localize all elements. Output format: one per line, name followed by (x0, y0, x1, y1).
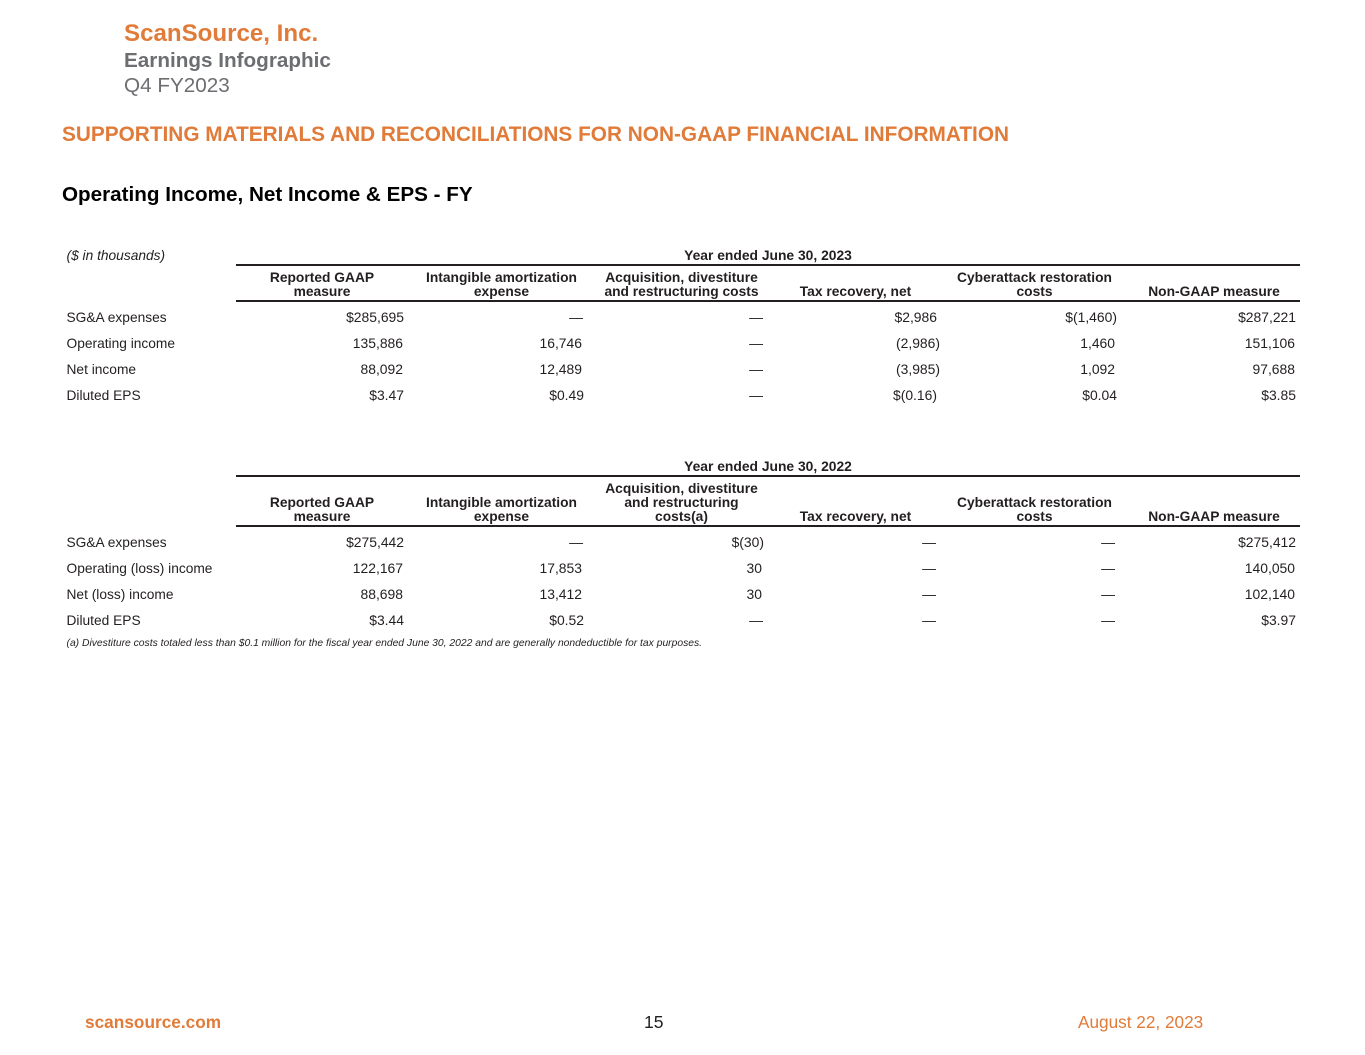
row: SG&A expenses 2022: $275,412 (1238, 534, 1296, 550)
column headers 2022: Acquisition, divestiture (605, 481, 758, 496)
row: Diluted EPS 2023: — (749, 387, 763, 403)
column headers 2023: Intangible amortization (426, 270, 577, 285)
row: Operating (loss) income 2022: 17,853 (540, 560, 582, 576)
row: Diluted EPS 2023: $0.49 (549, 387, 584, 403)
table section title: Operating Income, Net Income & EPS - FY (62, 183, 473, 206)
row: Diluted EPS 2022: $3.44 (369, 612, 404, 628)
column headers 2023: and restructuring costs (604, 284, 759, 299)
panel: FY2022 reconciliation table (66, 458, 1300, 649)
panel: FY2023 reconciliation table (66, 247, 1300, 403)
footer website: scansource.com (85, 1012, 221, 1032)
row: Operating income 2023: 16,746 (540, 335, 582, 351)
row: SG&A expenses 2023: $285,695 (346, 309, 404, 325)
column headers 2022: Cyberattack restoration (957, 495, 1112, 510)
column headers 2023: Acquisition, divestiture (605, 270, 758, 285)
row: Diluted EPS 2022: $3.97 (1261, 612, 1296, 628)
units note: ($ in thousands) (66, 248, 165, 263)
column headers 2023 (270, 270, 1280, 299)
header: company title block (124, 20, 331, 97)
row: Operating (loss) income 2022: — (922, 560, 936, 576)
column headers 2022 (270, 481, 1280, 524)
row: SG&A expenses 2022 (66, 534, 1296, 550)
row: Operating (loss) income 2022: — (1101, 560, 1115, 576)
row: Operating (loss) income 2022: 30 (747, 560, 762, 576)
row: SG&A expenses 2023: $(1,460) (1065, 309, 1117, 325)
row: SG&A expenses 2023 (66, 309, 1296, 325)
row: Operating income 2023: Operating income (66, 336, 175, 351)
column headers 2023: expense (474, 284, 529, 299)
row: Diluted EPS 2023 (66, 387, 1296, 403)
row: Diluted EPS 2023: Diluted EPS (66, 388, 141, 403)
row: Diluted EPS 2023: $3.47 (369, 387, 404, 403)
row: SG&A expenses 2022: $(30) (732, 534, 764, 550)
row: Net (loss) income 2022 (66, 586, 1295, 602)
row: Operating (loss) income 2022: Operating (loss) income (66, 561, 212, 576)
row: Net income 2023: 1,092 (1080, 361, 1115, 377)
row: Diluted EPS 2022: Diluted EPS (66, 613, 141, 628)
row: Operating income 2023: 151,106 (1245, 335, 1295, 351)
column headers 2023: Tax recovery, net (800, 284, 911, 299)
row: Operating income 2023: 135,886 (353, 335, 403, 351)
row: SG&A expenses 2022: — (569, 534, 583, 550)
row: Net (loss) income 2022: 13,412 (540, 586, 582, 602)
row: Net income 2023: 97,688 (1252, 361, 1295, 377)
row: Net income 2023: 12,489 (540, 361, 582, 377)
row: SG&A expenses 2023: — (749, 309, 763, 325)
column headers 2022: expense (474, 509, 529, 524)
row: Operating income 2023: — (749, 335, 763, 351)
period heading 2022: Year ended June 30, 2022 (684, 458, 852, 474)
section heading: SUPPORTING MATERIALS AND RECONCILIATIONS FOR NON-GAAP FINANCIAL INFORMATION (62, 123, 1009, 146)
row: Operating income 2023: (2,986) (896, 335, 940, 351)
row: Operating (loss) income 2022: 140,050 (1245, 560, 1295, 576)
company name: ScanSource, Inc. (124, 20, 318, 47)
row: Diluted EPS 2022: — (749, 612, 763, 628)
row: Diluted EPS 2023: $(0.16) (893, 387, 937, 403)
column headers 2022: costs(a) (655, 509, 708, 524)
period heading 2023: Year ended June 30, 2023 (684, 247, 852, 263)
subtitle: Earnings Infographic (124, 49, 331, 72)
row: SG&A expenses 2022: $275,442 (346, 534, 404, 550)
row: Diluted EPS 2023: $0.04 (1082, 387, 1117, 403)
row: Diluted EPS 2022: $0.52 (549, 612, 584, 628)
row: SG&A expenses 2023: — (569, 309, 583, 325)
row: Operating income 2023 (66, 335, 1295, 351)
row: Operating (loss) income 2022: 122,167 (353, 560, 403, 576)
column headers 2022: Non-GAAP measure (1148, 509, 1280, 524)
row: Net (loss) income 2022: 88,698 (360, 586, 403, 602)
row: SG&A expenses 2022: — (1101, 534, 1115, 550)
period: Q4 FY2023 (124, 74, 230, 97)
column headers 2022: Tax recovery, net (800, 509, 911, 524)
row: Net (loss) income 2022: — (1101, 586, 1115, 602)
column headers 2022: Intangible amortization (426, 495, 577, 510)
row: SG&A expenses 2023: SG&A expenses (66, 310, 167, 325)
row: Diluted EPS 2022: — (1101, 612, 1115, 628)
row: SG&A expenses 2023: $287,221 (1238, 309, 1296, 325)
row: Net income 2023 (66, 361, 1295, 377)
row: Net (loss) income 2022: 30 (747, 586, 762, 602)
row: Diluted EPS 2022 (66, 612, 1296, 628)
page number: 15 (644, 1012, 663, 1032)
footnote: (a) Divestiture costs totaled less than $0.1 million for the fiscal year ended June 30, 2022 and are generally nondeductible for tax purposes. (66, 638, 702, 649)
row: Net (loss) income 2022: — (922, 586, 936, 602)
column headers 2022: costs (1016, 509, 1053, 524)
row: Operating income 2023: 1,460 (1080, 335, 1115, 351)
row: Net income 2023: — (749, 361, 763, 377)
row: SG&A expenses 2022: — (922, 534, 936, 550)
row: Net income 2023: (3,985) (896, 361, 940, 377)
column headers 2023: Reported GAAP (270, 270, 374, 285)
footer date: August 22, 2023 (1078, 1012, 1203, 1032)
column headers 2023: Cyberattack restoration (957, 270, 1112, 285)
row: Diluted EPS 2022: — (922, 612, 936, 628)
row: Net income 2023: Net income (66, 362, 136, 377)
column headers 2023: Non-GAAP measure (1148, 284, 1280, 299)
row: Net income 2023: 88,092 (360, 361, 403, 377)
row: SG&A expenses 2022: SG&A expenses (66, 535, 167, 550)
column headers 2023: costs (1016, 284, 1053, 299)
column headers 2023: measure (294, 284, 350, 299)
row: SG&A expenses 2023: $2,986 (894, 309, 937, 325)
row: Net (loss) income 2022: 102,140 (1245, 586, 1295, 602)
row: Operating (loss) income 2022 (66, 560, 1295, 576)
column headers 2022: and restructuring (624, 495, 739, 510)
row: Diluted EPS 2023: $3.85 (1261, 387, 1296, 403)
row: Net (loss) income 2022: Net (loss) income (66, 587, 173, 602)
column headers 2022: Reported GAAP (270, 495, 374, 510)
column headers 2022: measure (294, 509, 350, 524)
